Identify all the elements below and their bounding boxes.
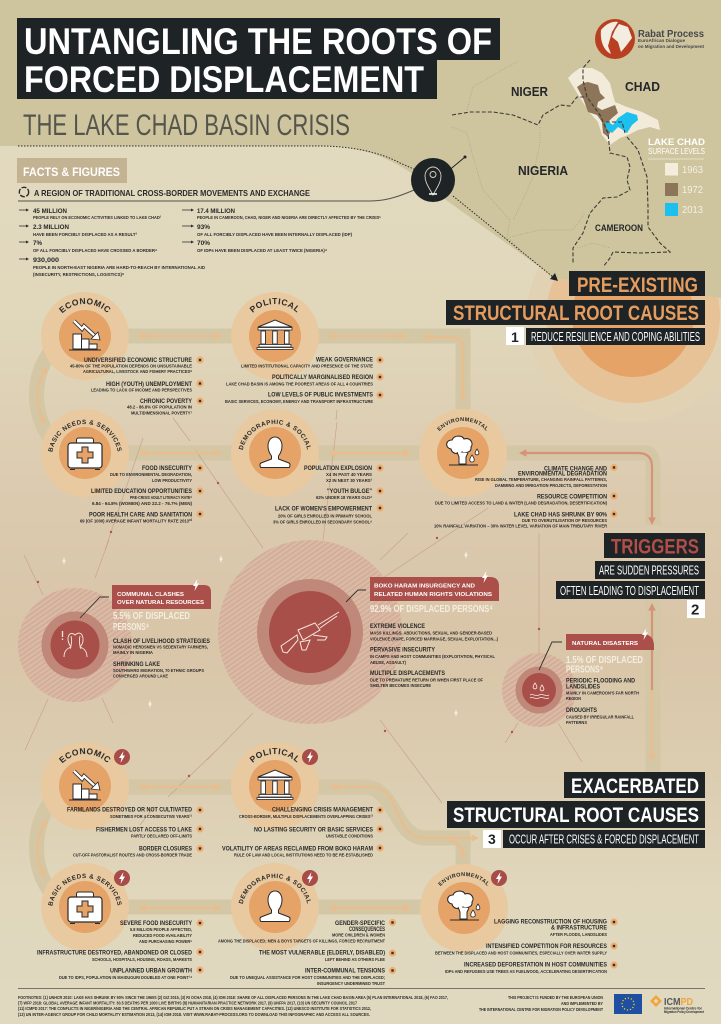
text: economic consequences: PARTLY DECLARED OFF-LIMITS	[131, 834, 193, 840]
details: NOMADIC HERDSMEN VS SEDENTARY FARMERS,	[113, 644, 209, 650]
lake chad surface 1963	[568, 68, 660, 145]
text: economic consequences: FARMLANDS DESTROYED OR NOT CULTIVATED	[67, 806, 192, 814]
text: political consequences: NO LASTING SECURITY OR BASIC SERVICES	[254, 826, 374, 834]
footnotes: (11) ICMPD 2017: THE CONFLICTS IN NIGER/NIGERIA AND THE CENTRAL AFRICAN REPUBLIC PUT A STRAIN ON CRISIS MANAGEMENT CAPACITIES. (12) UNESCO INSTITUTE FOR STATISTICS 2012,	[18, 1006, 371, 1011]
footnotes: FOOTNOTES: (1) UNHCR 2010: LAKE HAS SHRUNK BY 90% SINCE THE 1960S (2) GIZ 2015, (3) RI OCHA 2018, (4) IOM 2018: SHARE OF ALL DISPLACED PERSONS IN THE LAKE CHAD BASIN AREA (5) PLAN INTERNATIONAL 2018, (6) FAO 2017,	[18, 995, 448, 1000]
text: demographic consequences: INSURGENCY UNDERMINED TRUST	[317, 981, 385, 987]
icon: medical kit	[68, 438, 102, 470]
heading: pre-existing structural root causes: 1	[511, 329, 519, 345]
arrow: triggers to exacerbated causes	[651, 606, 653, 758]
text: demographic causes: 3% OF GIRLS ENROLLED IN SECONDARY SCHOOL⁴	[273, 520, 372, 526]
heading: exacerbated structural root causes: 3	[488, 831, 496, 847]
text: demographic causes: 20% OF GIRLS ENROLLED IN PRIMARY SCHOOL	[278, 514, 372, 520]
details	[566, 678, 639, 726]
statistic: 5.5% OF DISPLACED	[113, 610, 190, 622]
logo: icmpd: International Centre for	[664, 1006, 703, 1010]
text: demographic causes	[273, 464, 384, 526]
text: basic needs consequences: UNPLANNED URBAN GROWTH	[110, 968, 192, 974]
details: MAINLY IN NIGERIA	[113, 650, 153, 656]
logo: european union flag	[614, 994, 642, 1014]
text: demographic causes: X2 IN NEXT 30 YEARS²	[326, 478, 372, 484]
text: political consequences: CROSS-BORDER, MULTIPLE DISPLACEMENTS OVERLAPPING CRISES¹²	[239, 814, 373, 820]
fact: 930,000: (INSECURITY, RESTRICTIONS, LOGISTICS)⁸	[33, 272, 125, 278]
callout line	[539, 642, 562, 670]
logo: rabat process: EuroAfrican Dialogue	[638, 38, 685, 43]
text: political consequences: CHALLENGING CRISIS MANAGEMENT	[272, 806, 373, 814]
text: economic causes: 45-80% OF THE POPULATION DEPENDS ON UNSUSTAINABLE	[70, 364, 193, 370]
text: basic needs causes: LIMITED EDUCATION OPPORTUNITIES	[91, 488, 193, 495]
legend: lake chad surface levels: 1963	[682, 165, 703, 176]
text: basic needs causes: PRE-CRISIS ADULT LITERACY RATE⁹	[130, 495, 192, 501]
sparkles	[62, 551, 468, 717]
text: demographic consequences: MORE CHILDREN & WOMEN	[332, 932, 385, 938]
footer rule	[18, 988, 705, 990]
fact arrows	[19, 208, 194, 260]
map label: niger: NIGER	[511, 84, 549, 99]
funding statement: AND IMPLEMENTED BY	[561, 1001, 603, 1006]
text: demographic causes: POPULATION EXPLOSION	[304, 465, 372, 472]
text: environmental consequences: INTENSIFIED COMPETITION FOR RESOURCES	[486, 943, 608, 950]
details: CLASH OF LIVELIHOOD STRATEGIES	[113, 638, 211, 645]
fact: 45 million	[33, 208, 161, 221]
text: environmental consequences	[435, 918, 618, 975]
text: environmental consequences: IDPs AND REFUGEES USE TREES AS FUELWOOD, ACCELERATING DESERTIFICATION	[445, 969, 607, 975]
text: economic causes: UNDIVERSIFIED ECONOMIC STRUCTURE	[84, 357, 193, 364]
heading: exacerbated structural root causes	[447, 772, 705, 848]
panel: environmental exacerbated	[420, 864, 508, 952]
icon: person	[260, 891, 290, 922]
text: basic needs causes: LOW PRODUCTIVITY	[152, 478, 193, 484]
panel: basic needs exacerbated	[41, 863, 130, 951]
text: political causes: LIMITED INSTITUTIONAL CAPACITY AND PRESENCE OF THE STATE	[241, 364, 374, 370]
text: economic consequences: CUT-OFF PASTORALIST ROUTES AND CROSS-BORDER TRADE	[73, 852, 193, 858]
legend: lake chad surface levels	[648, 137, 705, 216]
fact: 930,000: 930,000	[33, 257, 59, 264]
panel: political exacerbated	[231, 742, 319, 830]
text: basic needs causes: POOR HEALTH CARE AND SANITATION	[89, 512, 192, 518]
icon: declining chart	[69, 771, 101, 800]
logo: icmpd: ICMPD	[664, 997, 693, 1008]
text: political causes: LOW LEVELS OF PUBLIC INVESTMENTS	[268, 392, 374, 398]
text: demographic causes: "YOUTH BULGE"	[327, 488, 372, 495]
details: EXTREME VIOLENCE	[370, 623, 426, 630]
circle with water icon	[502, 653, 576, 727]
text: economic consequences: FISHERMEN LOST ACCESS TO LAKE	[96, 826, 193, 834]
label: environmental: ENVIRONMENTAL	[438, 872, 488, 886]
fact: 45 million: 45 MILLION	[33, 208, 67, 215]
panel: facts and figures	[17, 158, 414, 278]
callout label	[566, 628, 654, 650]
text: demographic consequences: THE MOST VULNERABLE (ELDERLY, DISABLED)	[259, 950, 385, 956]
text: environmental causes: DAMMING AND IRRIGATION PROJECTS, DEFORESTATION	[495, 483, 607, 489]
fact: 70%	[197, 240, 328, 254]
badge: bolt	[114, 749, 130, 765]
text: environmental causes: 10% RAINFALL VARIATION – 30% WATER LEVEL VARIATION OF MAIN TRIBUTARY RIVER	[434, 524, 607, 530]
label: economic: ECONOMIC	[58, 748, 110, 764]
callout label: BOKO HARAM INSURGENCY AND	[374, 584, 475, 590]
fact: 70%: OF IDPs HAVE BEEN DISPLACED AT LEAST TWICE (NIGERIA)⁴	[197, 248, 328, 254]
text: basic needs consequences: 5.8 MILLION PEOPLE AFFECTED,	[130, 927, 193, 933]
details: MASS KILLINGS, ABDUCTIONS, SEXUAL AND GENDER-BASED	[370, 630, 492, 636]
details: SHRINKING LAKE	[113, 661, 161, 668]
text: demographic consequences: LEFT BEHIND AS OTHERS FLEE	[325, 957, 386, 963]
text: basic needs consequences: INFRASTRUCTURE DESTROYED, ABANDONED OR CLOSED	[37, 950, 192, 956]
callout line	[80, 597, 109, 618]
funding statement: THE INTERNATIONAL CENTRE FOR MIGRATION POLICY DEVELOPMENT	[479, 1007, 603, 1012]
title: UNTANGLING THE ROOTS OF	[24, 21, 492, 62]
text: basic needs causes: 6.84 - 64.8% (WOMEN) AND 22.2 - 76.7% (MEN)	[92, 501, 192, 507]
text: demographic consequences: INTER-COMMUNAL TENSIONS	[305, 968, 386, 974]
fact: 7%	[33, 240, 157, 254]
panel: environmental	[419, 409, 507, 497]
text: economic causes: HIGH (YOUTH) UNEMPLOYMENT	[106, 381, 192, 388]
fact: 7%: OF ALL FORCIBLY DISPLACED HAVE CROSSED A BORDER⁴	[33, 248, 157, 254]
icon: institution building	[257, 770, 293, 800]
label: demographic: DEMOGRAPHIC & SOCIAL	[238, 874, 311, 904]
heading: triggers: TRIGGERS	[611, 536, 699, 558]
panel: basic needs	[41, 409, 129, 497]
callout label: COMMUNAL CLASHES	[117, 592, 184, 598]
facts heading: FACTS & FIGURES	[23, 165, 120, 179]
label: demographic: DEMOGRAPHIC & SOCIAL	[238, 420, 311, 450]
text: economic causes: AGRICULTURAL, LIVESTOCK AND FISHERY PRACTICES⁸	[83, 369, 193, 375]
badge: bolt	[302, 749, 318, 765]
map label: nigeria: NIGERIA	[518, 163, 569, 178]
icon: institution building	[257, 320, 293, 350]
dotted path to pre-existing root causes	[18, 146, 553, 277]
connector pipes	[36, 336, 653, 907]
funding statement: THIS PROJECT IS FUNDED BY THE EUROPEAN UNION	[508, 995, 604, 1000]
logo: rabat process: on Migration and Development	[638, 44, 704, 49]
text: economic causes: LEADING TO LACK OF INCOME AND PERSPECTIVES	[91, 388, 193, 394]
legend: lake chad surface levels: 2013	[682, 205, 703, 216]
fact: 930,000: PEOPLE IN NORTH-EAST NIGERIA ARE HARD-TO-REACH BY INTERNATIONAL AID	[33, 265, 205, 271]
national borders	[452, 60, 670, 267]
heading: pre-existing structural root causes: PRE-EXISTING	[577, 274, 698, 297]
details: REGION	[566, 696, 581, 702]
text: political consequences: VOLATILITY OF AREAS RECLAIMED FROM BOKO HARAM	[222, 846, 373, 852]
panel: economic exacerbated	[41, 742, 130, 830]
callout line	[346, 590, 366, 602]
text: basic needs causes: 69 (OF 1000) AVERAGE INFANT MORTALITY RATE 2013¹⁰	[80, 518, 192, 524]
details	[113, 638, 211, 680]
icon: medical kit	[68, 892, 102, 924]
footnotes	[18, 995, 448, 1017]
text: environmental causes: DUE TO LIMITED ACCESS TO LAND & WATER (LAND DEGRADATION, DESERTIFICATION)	[435, 500, 607, 506]
details: PERVASIVE INSECURITY	[370, 646, 436, 654]
panel: natural disasters	[502, 628, 654, 727]
circle with people icon	[18, 588, 132, 702]
map label: cameroon: CAMEROON	[595, 223, 643, 234]
fact: 2.3 million: 2.3 MILLION	[33, 224, 69, 231]
facts rule	[18, 190, 414, 201]
details: PERIODIC FLOODING AND	[566, 678, 635, 684]
details: ABUSE, ASSAULT)	[370, 660, 406, 666]
label: environmental: ENVIRONMENTAL	[437, 417, 488, 431]
label: economic: ECONOMIC	[58, 298, 110, 314]
funding statement	[479, 995, 604, 1012]
text: political causes: BASIC SERVICES, ECONOMY, ENERGY AND TRANSPORT INFRASTRUCTURE	[225, 399, 374, 405]
details: MULTIPLE DISPLACEMENTS	[370, 670, 446, 677]
text: basic needs consequences: DUE TO IDPS, POPULATION IN MAIDUGURI DOUBLED AT ONE POINT¹⁴	[59, 975, 192, 981]
fact: 2.3 million: HAVE BEEN FORCIBLY DISPLACED AS A RESULT³	[33, 232, 137, 238]
panel: demographic	[231, 409, 319, 497]
logo: rabat process: Rabat Process	[638, 29, 704, 40]
footnotes: (7) WFP 2018: GLOBAL AVERAGE INFANT MORTALITY: 30.5 DEATHS PER 1000 LIVE BIRTHS (8) HUMANITARIAN PRACTICE NETWORK 2017, (9) UNFPA 2017, (10) UN SECURITY COUNCIL 2017	[18, 1000, 357, 1006]
pre-existing root causes concentric circles	[527, 210, 721, 422]
text: economic consequences: SOMETIMES FOR 4 CONSECUTIVE YEARS¹¹	[110, 814, 192, 820]
thin connector lines between triggers	[24, 410, 582, 825]
title	[17, 18, 500, 100]
subtitle: THE LAKE CHAD BASIN CRISIS	[23, 109, 350, 142]
fact: 93%: 93%	[197, 224, 210, 231]
legend: lake chad surface levels: LAKE CHAD	[648, 137, 705, 148]
text: environmental causes: RESOURCE COMPETITION	[537, 494, 607, 500]
panel: boko haram	[218, 540, 499, 724]
details: CAUSED BY IRREGULAR RAINFALL	[566, 714, 634, 720]
details: SOUTHWARD MIGRATION, 70 ETHNIC GROUPS	[113, 668, 205, 674]
text: political causes: POLITICALLY MARGINALISED REGION	[272, 374, 373, 381]
details: DUE TO PREMATURE RETURN OR WHEN FIRST PLACE OF	[370, 678, 483, 684]
text: demographic consequences: AMONG THE DISPLACED; MEN & BOYS TARGETS OF KILLINGS, FORCED RECRUITMENT	[218, 938, 385, 944]
text: environmental consequences: BETWEEN THE DISPLACED AND HOST COMMUNITIES, ESPECIALLY OVER WATER SUPPLY	[435, 950, 608, 956]
facts subheading: A REGION OF TRADITIONAL CROSS-BORDER MOVEMENTS AND EXCHANGE	[34, 188, 310, 198]
text: demographic causes: X4 IN PAST 40 YEARS	[326, 472, 373, 478]
text: basic needs causes: FOOD INSECURITY	[142, 465, 193, 472]
text: political causes: WEAK GOVERNANCE	[316, 356, 374, 364]
text: demographic causes: 62% UNDER 18 YEARS OLD⁴	[316, 495, 372, 501]
text: economic consequences	[67, 806, 204, 858]
text: demographic consequences	[218, 919, 396, 987]
dotted path arrowhead	[550, 273, 558, 281]
connector dots	[37, 482, 540, 777]
text: environmental causes: ENVIRONMENTAL DEGRADATION	[518, 470, 607, 478]
text: basic needs consequences: SEVERE FOOD INSECURITY	[120, 920, 193, 927]
circle with rifle icon	[218, 540, 402, 724]
panel: communal clashes	[18, 579, 211, 702]
text: environmental consequences: & INFRASTRUCTURE	[551, 924, 608, 932]
text: economic consequences: BORDER CLOSURES	[139, 846, 193, 852]
label: political: POLITICAL	[250, 748, 298, 763]
fact: 17.4 million	[197, 208, 381, 221]
text: demographic consequences: DUE TO UNEQUAL ASSISTANCE FOR HOST COMMUNITIES AND THE DISPLACED;	[230, 975, 385, 981]
text: environmental causes: CLIMATE CHANGE AND	[544, 466, 607, 472]
callout label: OVER NATURAL RESOURCES	[117, 600, 204, 606]
text: environmental causes	[434, 464, 618, 530]
panel: economic	[41, 292, 129, 380]
text: political causes: LAKE CHAD BASIN IS AMONG THE POOREST AREAS OF ALL 4 COUNTRIES	[226, 382, 374, 388]
fact: 93%	[197, 224, 352, 238]
text: demographic causes: LACK OF WOMEN'S EMPOWERMENT	[275, 506, 372, 512]
text: political causes	[225, 356, 384, 405]
text: basic needs consequences: SCHOOLS, HOSPITALS, HOUSING, ROADS, MARKETS	[92, 957, 193, 963]
details: MAINLY IN CAMEROON'S FAR NORTH	[566, 690, 639, 696]
callout label	[112, 579, 211, 609]
statistic: PERSONS⁴	[566, 664, 603, 676]
fact: 7%: 7%	[33, 240, 42, 247]
text: environmental causes: RISE IN GLOBAL TEMPERATURE, CHANGING RAINFALL PATTERNS,	[475, 477, 608, 483]
panel: political	[231, 292, 319, 380]
text: demographic consequences: CONSEQUENCES	[349, 926, 385, 933]
text: political consequences	[222, 806, 384, 858]
text: basic needs causes	[80, 464, 204, 524]
icon: location pin	[411, 156, 466, 202]
text: environmental consequences: AFTER FLOODS, LANDSLIDES	[550, 932, 608, 938]
text: economic causes: CHRONIC POVERTY	[140, 398, 193, 405]
lake chad surface 1972	[577, 82, 618, 137]
icon: tree and drops	[448, 891, 480, 920]
badge: bolt	[491, 870, 507, 886]
map background region	[0, 0, 721, 298]
fact: 70%: 70%	[197, 240, 210, 247]
details: SHELTER BECOMES INSECURE	[370, 683, 432, 689]
callout label: RELATED HUMAN RIGHTS VIOLATIONS	[374, 592, 492, 598]
fact: 45 million: PEOPLE RELY ON ECONOMIC ACTIVITIES LINKED TO LAKE CHAD²	[33, 215, 161, 221]
statistic	[113, 610, 190, 633]
label: basic needs: BASIC NEEDS & SERVICES	[48, 874, 122, 906]
fact: 17.4 million: PEOPLE IN CAMEROON, CHAD, NIGER AND NIGERIA ARE DIRECTLY AFFECTED BY THE CRISIS⁵	[197, 215, 381, 221]
label: political: POLITICAL	[250, 298, 298, 313]
badge: bolt	[114, 870, 130, 886]
text: environmental causes: DUE TO OVERUTILISATION OF RESOURCES	[522, 518, 608, 524]
map label: chad: CHAD	[625, 79, 660, 94]
statistic: 1.5% OF DISPLACED	[566, 654, 643, 666]
fact: 17.4 million: 17.4 MILLION	[197, 208, 235, 215]
text: demographic consequences: GENDER-SPECIFIC	[335, 920, 385, 927]
text: basic needs consequences: REDUCED FOOD AVAILABILITY	[133, 933, 193, 939]
title: FORCED DISPLACEMENT	[24, 59, 424, 100]
text: basic needs causes: DUE TO ENVIRONMENTAL DEGRADATION,	[110, 472, 193, 478]
text: political consequences: UNSTABLE CONDITIONS	[326, 834, 374, 840]
fact: 2.3 million	[33, 224, 137, 238]
text: environmental consequences: INCREASED DEFORESTATION IN HOST COMMUNITIES	[464, 962, 608, 968]
text: political consequences: RULE OF LAW AND LOCAL INSTITUTIONS NEED TO BE RE-ESTABLISHED	[234, 852, 373, 858]
arrows: pre-existing causes	[37, 336, 652, 522]
heading: pre-existing structural root causes	[446, 271, 705, 345]
icon: person	[260, 437, 290, 468]
details: VIOLENCE (RAPE, FORCED MARRIAGE, SEXUAL EXPLOITATION...)	[370, 636, 498, 642]
legend: lake chad surface levels: SURFACE LEVELS	[648, 147, 705, 156]
lake chad surface 2013	[605, 112, 638, 133]
details: PATTERNS	[566, 720, 588, 726]
text: basic needs consequences	[37, 919, 204, 981]
legend: lake chad surface levels: 1972	[682, 185, 703, 196]
heading: triggers: 2	[691, 602, 699, 618]
statistic: PERSONS⁴	[113, 621, 149, 633]
text: economic causes	[70, 356, 204, 416]
map	[452, 60, 705, 267]
logo: icmpd: Migration Policy Development	[664, 1010, 705, 1014]
logo: icmpd	[650, 995, 705, 1014]
heading: triggers	[556, 533, 705, 618]
label: basic needs: BASIC NEEDS & SERVICES	[48, 420, 122, 452]
text: economic causes: MULTIDIMENSIONAL POVERTY⁷	[131, 410, 192, 416]
arrows: exacerbated causes	[37, 787, 476, 908]
text: basic needs consequences: AND PURCHASING POWER⁶	[139, 939, 192, 945]
statistic: 92.9% OF DISPLACED PERSONS⁴	[370, 603, 493, 615]
statistic	[566, 654, 643, 676]
callout label: NATURAL DISASTERS	[572, 641, 638, 647]
text: environmental causes: LAKE CHAD HAS SHRUNK BY 90%	[514, 512, 607, 518]
text: environmental consequences: LAGGING RECONSTRUCTION OF HOUSING	[494, 918, 607, 926]
callout label	[370, 571, 499, 601]
icon: tree and drops	[447, 436, 479, 465]
details: LANDSLIDES	[566, 684, 601, 690]
facts heading	[17, 158, 127, 183]
state boundaries	[452, 62, 610, 252]
panel: demographic exacerbated	[231, 863, 319, 951]
icon: declining chart	[69, 321, 101, 350]
badge: bolt	[302, 870, 318, 886]
details: DROUGHTS	[566, 707, 598, 714]
details: IN CAMPS AND HOST COMMUNITIES (EXPLOITATION, PHYSICAL	[370, 654, 495, 660]
fact: 930,000	[33, 257, 205, 278]
icon: circular arrows	[19, 187, 29, 197]
text: economic causes: 48.2 - 86.8% OF POPULATION IN	[127, 404, 192, 410]
logo: rabat process	[595, 19, 704, 59]
fact: 93%: OF ALL FORCIBLY DISPLACED HAVE BEEN INTERNALLY DISPLACED (IDP)	[197, 232, 352, 238]
details: CONVERGED AROUND LAKE	[113, 674, 169, 680]
footnotes: (13) UN INTER-AGENCY GROUP FOR CHILD MORTALITY ESTIMATION 2013, (14) IOM 2018. VISIT WWW.RABAT-PROCESS.ORG TO DOWNLOAD THIS INFOGRAPHIC AND ACCESS ALL SOURCES.	[18, 1012, 370, 1017]
details	[370, 623, 498, 689]
